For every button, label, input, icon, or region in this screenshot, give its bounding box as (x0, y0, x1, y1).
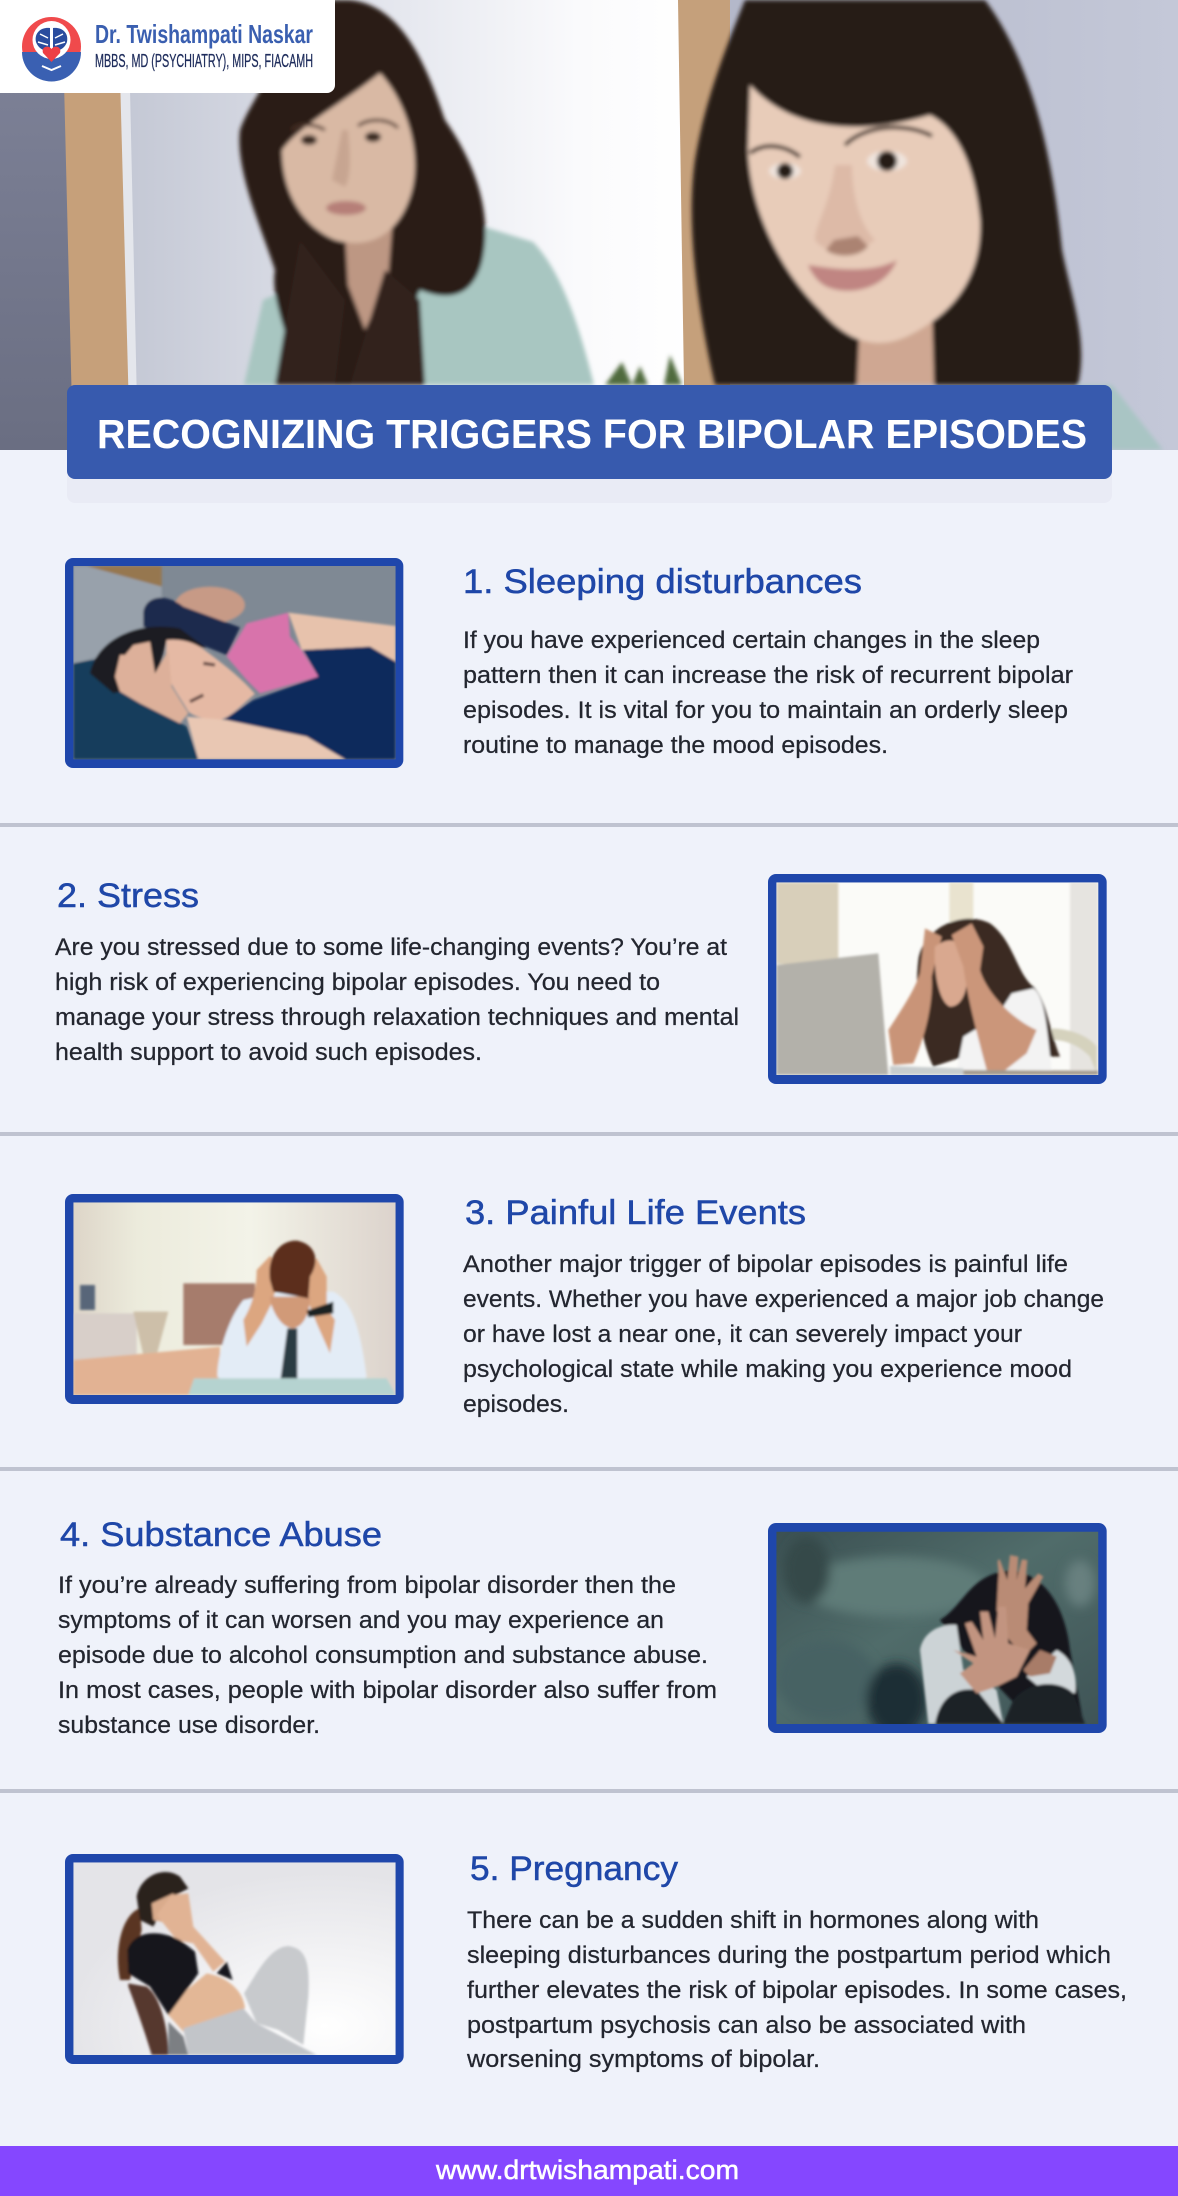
body text: high risk of experiencing bipolar episodes. You need to (55, 969, 660, 996)
right woman (692, 0, 1081, 385)
body text (463, 627, 1073, 759)
body text: symptoms of it can worsen and you may experience an (58, 1607, 664, 1634)
body text: or have lost a near one, it can severely impact your (463, 1321, 1022, 1348)
body text: episode due to alcohol consumption and substance abuse. (58, 1642, 708, 1669)
body text: postpartum psychosis can also be associated with (467, 2012, 1026, 2039)
section 4: substance abuse (58, 1516, 1107, 1739)
plant (602, 354, 684, 385)
body text: Another major trigger of bipolar episodes is painful life (463, 1251, 1068, 1278)
title: RECOGNIZING TRIGGERS FOR BIPOLAR EPISODES (97, 411, 1087, 457)
photo: pregnant woman covering face (65, 1854, 404, 2064)
logo icon: brain and heart (22, 17, 81, 82)
body text: sleeping disturbances during the postpartum period which (467, 1942, 1111, 1969)
section 5: pregnancy (65, 1850, 1127, 2073)
body text: events. Whether you have experienced a major job change (463, 1286, 1104, 1313)
body text: episodes. (463, 1391, 569, 1418)
heading: 1. Sleeping disturbances (463, 563, 862, 601)
body text: episodes. It is vital for you to maintain an orderly sleep (463, 697, 1068, 724)
heading: 4. Substance Abuse (60, 1516, 382, 1554)
body text: substance use disorder. (58, 1712, 320, 1739)
body text: In most cases, people with bipolar disorder also suffer from (58, 1677, 717, 1704)
left woman (244, 224, 594, 385)
photo: woman raising hands (768, 1523, 1107, 1737)
credentials: MBBS, MD (PSYCHIATRY), MIPS, FIACAMH (95, 51, 313, 71)
body text: manage your stress through relaxation techniques and mental (55, 1004, 739, 1031)
heading: 3. Painful Life Events (465, 1194, 806, 1232)
hero photo: two faces of a woman (0, 0, 1178, 450)
logo panel (0, 0, 335, 93)
body text (463, 1251, 1104, 1418)
body text (466, 1907, 1127, 2073)
title banner (67, 385, 1112, 503)
body text: further elevates the risk of bipolar episodes. In some cases, (467, 1977, 1127, 2004)
section 3: painful life events (65, 1194, 1104, 1418)
body text: If you’re already suffering from bipolar disorder then the (58, 1572, 676, 1599)
footer bar (0, 2146, 1178, 2196)
photo: woman stressed at laptop (768, 874, 1107, 1084)
heading: 2. Stress (57, 877, 199, 915)
section 1: sleeping disturbances (65, 558, 1073, 768)
body text: worsening symptoms of bipolar. (466, 2046, 820, 2073)
body text: routine to manage the mood episodes. (463, 732, 888, 759)
photo: couple in bed (65, 558, 403, 768)
heading: 5. Pregnancy (470, 1850, 678, 1888)
body text: Are you stressed due to some life-changing events? You’re at (55, 934, 727, 961)
website: www.drtwishampati.com (435, 2155, 739, 2185)
section 2: stress (55, 874, 1107, 1084)
body text: health support to avoid such episodes. (55, 1039, 482, 1066)
body text (55, 934, 739, 1066)
body text (58, 1572, 717, 1739)
body text: There can be a sudden shift in hormones along with (467, 1907, 1039, 1934)
doctor name: Dr. Twishampati Naskar (95, 19, 313, 49)
photo: man with head in hands (65, 1194, 404, 1404)
body text: If you have experienced certain changes in the sleep (463, 627, 1040, 654)
body text: psychological state while making you experience mood (463, 1356, 1072, 1383)
body text: pattern then it can increase the risk of recurrent bipolar (463, 662, 1073, 689)
